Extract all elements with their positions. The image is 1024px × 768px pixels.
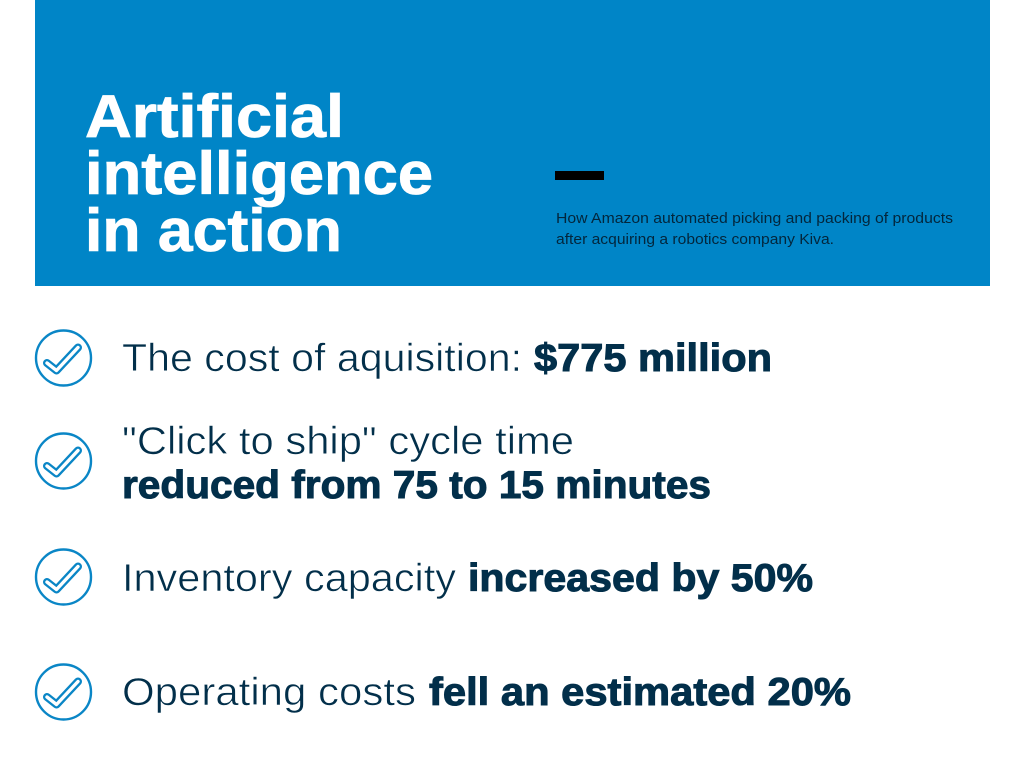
icon: check circle	[36, 434, 91, 488]
subtitle	[556, 210, 953, 248]
icon: check circle	[36, 330, 91, 386]
title: intelligence	[85, 140, 433, 207]
subtitle: How Amazon automated picking and packing of products	[556, 210, 953, 227]
text: fell an estimated 20%	[429, 671, 851, 714]
text	[122, 337, 772, 380]
subtitle: after acquiring a robotics company Kiva.	[556, 231, 834, 248]
icon: check circle	[36, 550, 91, 604]
text: "Click to ship" cycle time	[122, 420, 574, 463]
item: inventory capacity	[36, 550, 813, 604]
title	[85, 83, 433, 264]
header panel	[35, 0, 990, 286]
accent bar	[555, 171, 604, 180]
icon: check circle	[36, 664, 91, 720]
title: in action	[85, 197, 342, 264]
text	[122, 420, 711, 507]
text: $775 million	[534, 337, 772, 380]
text: Inventory capacity	[122, 557, 457, 600]
item: operating costs	[36, 664, 851, 720]
title: Artificial	[85, 83, 344, 150]
text: The cost of aquisition:	[122, 337, 522, 380]
text: reduced from 75 to 15 minutes	[122, 464, 711, 507]
text	[122, 557, 813, 600]
text	[122, 671, 851, 714]
text: increased by 50%	[468, 557, 813, 600]
item: cost of acquisition	[36, 330, 772, 386]
item: click to ship	[36, 420, 711, 507]
text: Operating costs	[122, 671, 416, 714]
